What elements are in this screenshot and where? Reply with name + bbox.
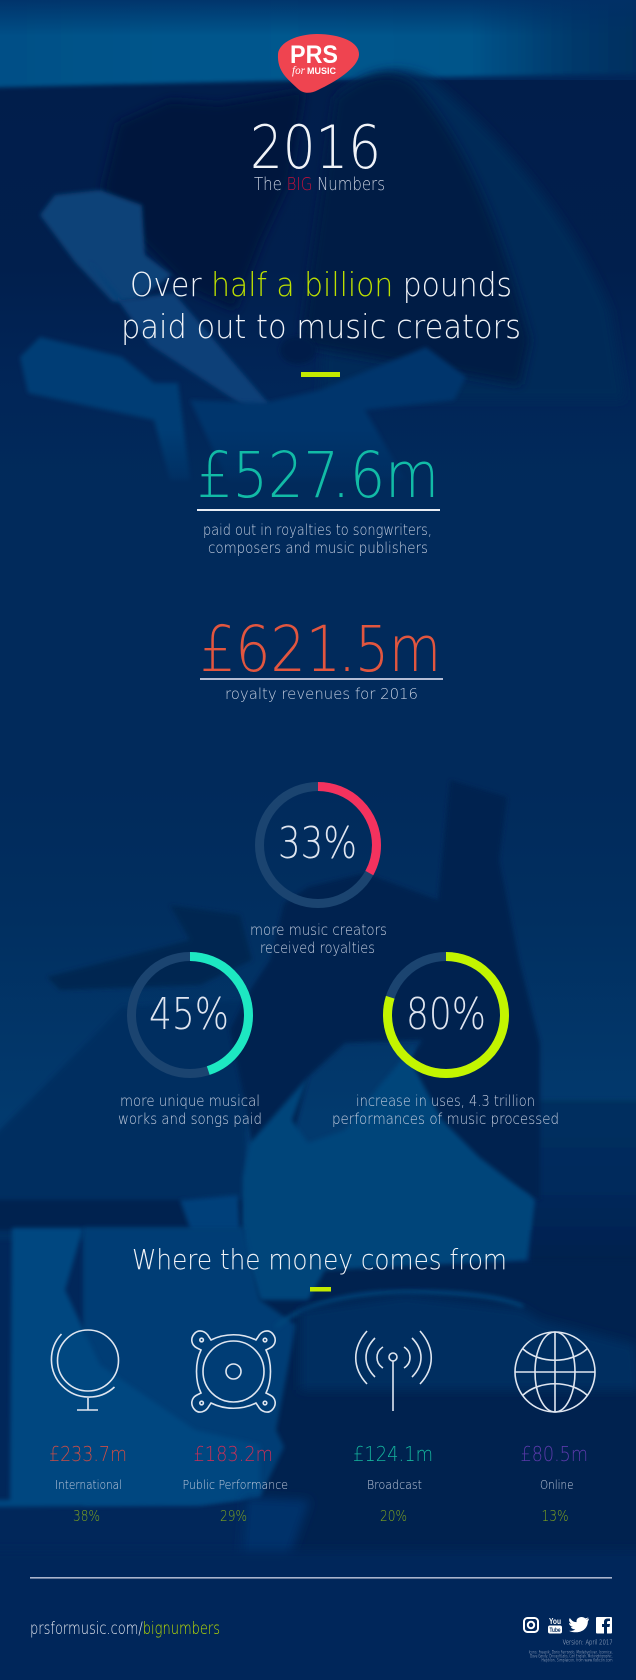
revenue: international [49,1442,127,1525]
revenue: broadcast: 20% [380,1507,407,1525]
revenue: public performance [182,1442,288,1525]
singer face and arm [230,780,540,1200]
icon: mirror globe [51,1330,119,1410]
stat: 621.5m royalty revenues: £621 [200,613,341,686]
lower figure [0,1195,636,1680]
revenue: online: 13% [542,1507,568,1525]
revenue: public performance: Public Performance [182,1477,288,1492]
section accent bar [310,1287,331,1292]
footer rule [30,1577,612,1579]
logo: PRS for MUSIC plectrum: MUSIC [307,66,336,77]
revenue: public performance: £183.2m [194,1442,273,1466]
icon: broadcast antenna [356,1331,431,1411]
revenue: broadcast: £124.1m [353,1442,433,1466]
revenue: international: 38% [73,1507,100,1525]
revenue: broadcast [353,1442,433,1525]
lower figure base [243,1262,636,1562]
icon credits [529,1650,613,1662]
icon credits: Icons: Freepik, Dario Ferrando, Madebyoliver, Iconnice, [529,1650,613,1654]
revenue: online [520,1442,588,1525]
title: 2016: 2016 [250,113,381,183]
donut: 33%: more music creators [250,921,387,939]
right side shadow [530,1100,636,1270]
icon credits: Hepblon, Simpleicon, from www.flaticon.com [542,1658,613,1662]
donut: 80%: performances of music processed [332,1110,559,1128]
icon: facebook [596,1617,612,1634]
stat: 621.5m royalty revenues [200,613,443,703]
donut: 45%: more unique musical [120,1092,260,1110]
icon: instagram [524,1618,538,1632]
stat: 621.5m royalty revenues: royalty revenues for 2016 [225,685,418,703]
version note: Version: April 2017 [563,1638,613,1646]
icon: speaker [192,1331,275,1412]
icon: twitter [569,1617,589,1632]
stat: 527.6m royalties paid [197,439,440,557]
donut: 33%: 33% [278,818,357,869]
singer hand and microphone [47,905,252,990]
donut: 80% [332,956,559,1128]
headline: paid out to music creators [121,307,521,346]
stat: 527.6m royalties paid: composers and music publishers [208,539,428,557]
singer arm shadow [0,1000,250,1240]
icon: youtube [548,1616,562,1634]
donut: 80%: 80% [406,989,486,1040]
stat: 527.6m royalties paid: 6m [350,439,439,512]
logo: PRS for MUSIC plectrum: for [292,63,305,77]
section heading: where the money comes from: Where the money comes from [132,1243,507,1276]
revenue: online: Online [540,1477,574,1492]
stat: 527.6m royalties paid: £527 [197,439,339,512]
icon: world globe [515,1332,595,1412]
donut: 33%: received royalties [260,939,375,957]
revenue: broadcast: Broadcast [367,1477,422,1492]
footer url: prsformusic.com/bignumbers [30,1619,220,1639]
logo: PRS for MUSIC plectrum [278,34,359,93]
guitar and hand [20,190,466,480]
donut: 45%: 45% [149,989,229,1040]
donut: 45%: works and songs paid [118,1110,262,1128]
dark stage area behind guitarist [0,80,636,500]
revenue: international: International [55,1477,122,1492]
singer shirt [243,1045,535,1300]
guitarist body and shirt [300,70,625,400]
donut: 80%: increase in uses, 4.3 trillion [356,1092,535,1110]
headline: Over half a billion pounds [130,265,512,304]
fade into middle section [0,430,636,500]
stat: 621.5m royalty revenues: 5m [355,613,441,686]
stat: 621.5m royalty revenues: . [337,613,357,686]
stat: 527.6m royalties paid: paid out in royalties to songwriters, [203,521,432,539]
icon: youtube: Tube [550,1627,561,1634]
icon: youtube: You [549,1616,561,1626]
subtitle: The BIG Numbers: The BIG Numbers [254,174,385,195]
logo: PRS for MUSIC plectrum: PRS [290,41,338,69]
revenue: public performance: 29% [220,1507,247,1525]
guitarist hair [102,90,304,310]
headline accent bar [301,372,340,377]
lower dark band [0,1200,243,1230]
revenue: international: £233.7m [49,1442,127,1466]
stat: 527.6m royalties paid: . [331,439,351,512]
lit band at top [0,0,636,88]
revenue: online: £80.5m [520,1442,588,1466]
headline [121,265,521,346]
singer backdrop [0,785,636,1230]
donut: 33% [250,786,387,957]
donut: 45% [118,956,262,1128]
